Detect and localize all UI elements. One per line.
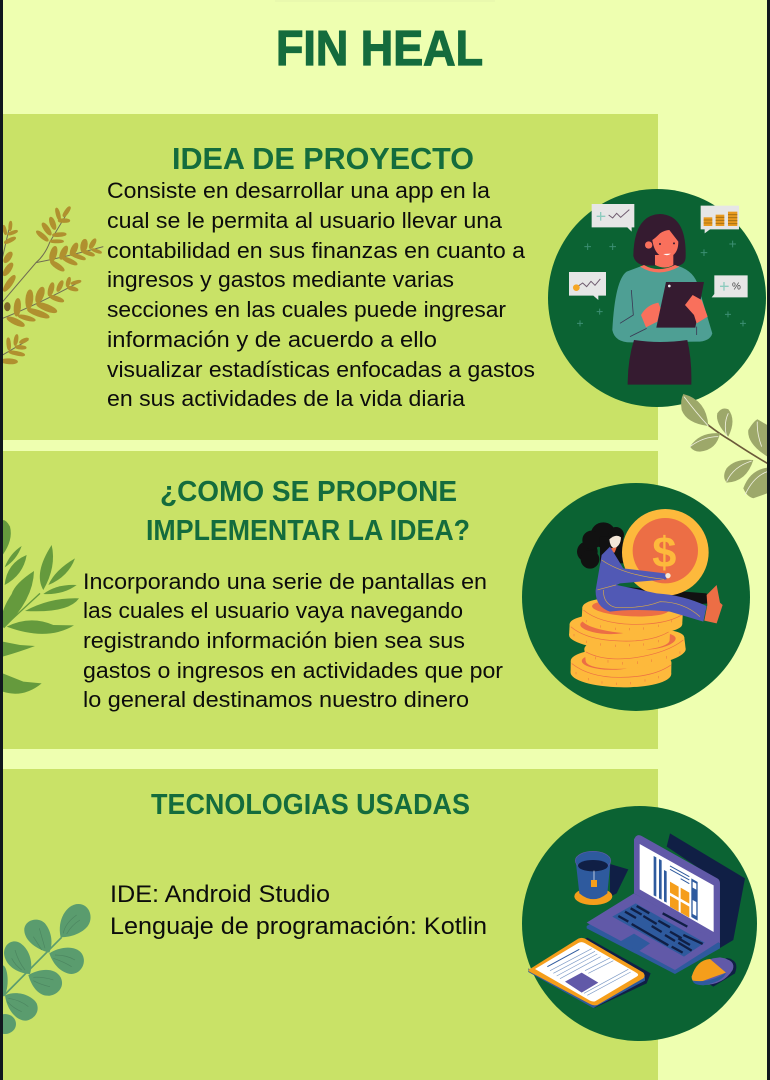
face xyxy=(652,230,678,257)
title: FIN HEAL xyxy=(276,22,483,76)
heading: tecnologias usadas: TECNOLOGIAS USADAS xyxy=(151,789,470,821)
text block: como se propone: las cuales el usuario vaya navegando xyxy=(83,598,463,623)
text block: tecnologias usadas: Lenguaje de programación: Kotlin xyxy=(110,913,487,940)
text block: como se propone: Incorporando una serie de pantallas en xyxy=(83,569,487,594)
heading: idea de proyecto: IDEA DE PROYECTO xyxy=(172,141,474,176)
body xyxy=(596,547,707,622)
coin: second xyxy=(568,611,671,653)
lid xyxy=(634,835,720,943)
tablet xyxy=(656,282,704,328)
text block: idea de proyecto: visualizar estadísticas enfocadas a gastos xyxy=(107,357,535,382)
panel: tecnologias usadas xyxy=(3,769,658,1080)
icon: round leaf branch xyxy=(0,904,91,1034)
left page edge xyxy=(0,0,3,1080)
text block: idea de proyecto: información y de acuerdo a ello xyxy=(107,327,437,352)
illustration: woman on coins xyxy=(522,483,750,711)
cup xyxy=(610,864,628,897)
skirt xyxy=(628,340,691,385)
coin ticks xyxy=(574,620,680,685)
right page edge xyxy=(767,0,770,1080)
keyboard xyxy=(612,903,705,957)
text block: como se propone: registrando información bien sea sus xyxy=(83,628,465,653)
boots xyxy=(704,585,723,623)
hand right xyxy=(685,295,708,323)
hair xyxy=(633,214,686,266)
panel: como se propone xyxy=(3,451,658,749)
coin: third xyxy=(583,625,687,674)
coin: bottom xyxy=(570,647,672,688)
text block: tecnologias usadas: IDE: Android Studio xyxy=(110,881,330,908)
icon: green leaf branch xyxy=(2,520,79,694)
text block: idea de proyecto: secciones en las cuales puede ingresar xyxy=(107,297,506,322)
heading: como se propone xyxy=(146,476,470,547)
text block: idea de proyecto: contabilidad en sus finanzas en cuanto a xyxy=(107,238,526,263)
bubbles xyxy=(569,204,748,300)
laptop base xyxy=(587,895,720,974)
tablet xyxy=(528,938,651,1008)
icon: fern branch xyxy=(1,206,103,364)
text block: como se propone: gastos o ingresos en actividades que por xyxy=(83,658,503,683)
illustration: woman with tablet: % xyxy=(732,281,741,292)
sweater xyxy=(612,266,712,342)
text block: idea de proyecto xyxy=(107,178,535,411)
hand left xyxy=(641,303,661,327)
text block: tecnologias usadas xyxy=(110,881,487,940)
mouse xyxy=(705,958,736,987)
back leg xyxy=(620,587,708,608)
big coin xyxy=(622,509,709,596)
icon: olive leaf branch xyxy=(681,394,767,498)
heading: como se propone: ¿COMO SE PROPONE xyxy=(160,476,457,508)
text block: idea de proyecto: Consiste en desarrollar una app en la xyxy=(107,178,491,203)
text block: idea de proyecto: ingresos y gastos mediante varias xyxy=(107,267,454,292)
text block: idea de proyecto: en sus actividades de la vida diaria xyxy=(107,386,466,411)
text block: como se propone: lo general destinamos nuestro dinero xyxy=(83,687,469,712)
hair xyxy=(577,522,624,569)
text block: idea de proyecto: cual se le permita al usuario llevar una xyxy=(107,208,503,233)
panel: idea de proyecto xyxy=(3,114,658,440)
coin: top xyxy=(581,595,684,636)
neck xyxy=(655,255,673,267)
sparkles xyxy=(577,241,746,326)
illustration: woman on coins: $ xyxy=(652,529,676,577)
heading: como se propone: IMPLEMENTAR LA IDEA? xyxy=(146,515,470,547)
screen shadow xyxy=(667,833,745,950)
illustration: laptop and desk xyxy=(522,806,757,1041)
illustration: woman with tablet xyxy=(548,189,766,407)
text block: como se propone xyxy=(83,569,503,712)
